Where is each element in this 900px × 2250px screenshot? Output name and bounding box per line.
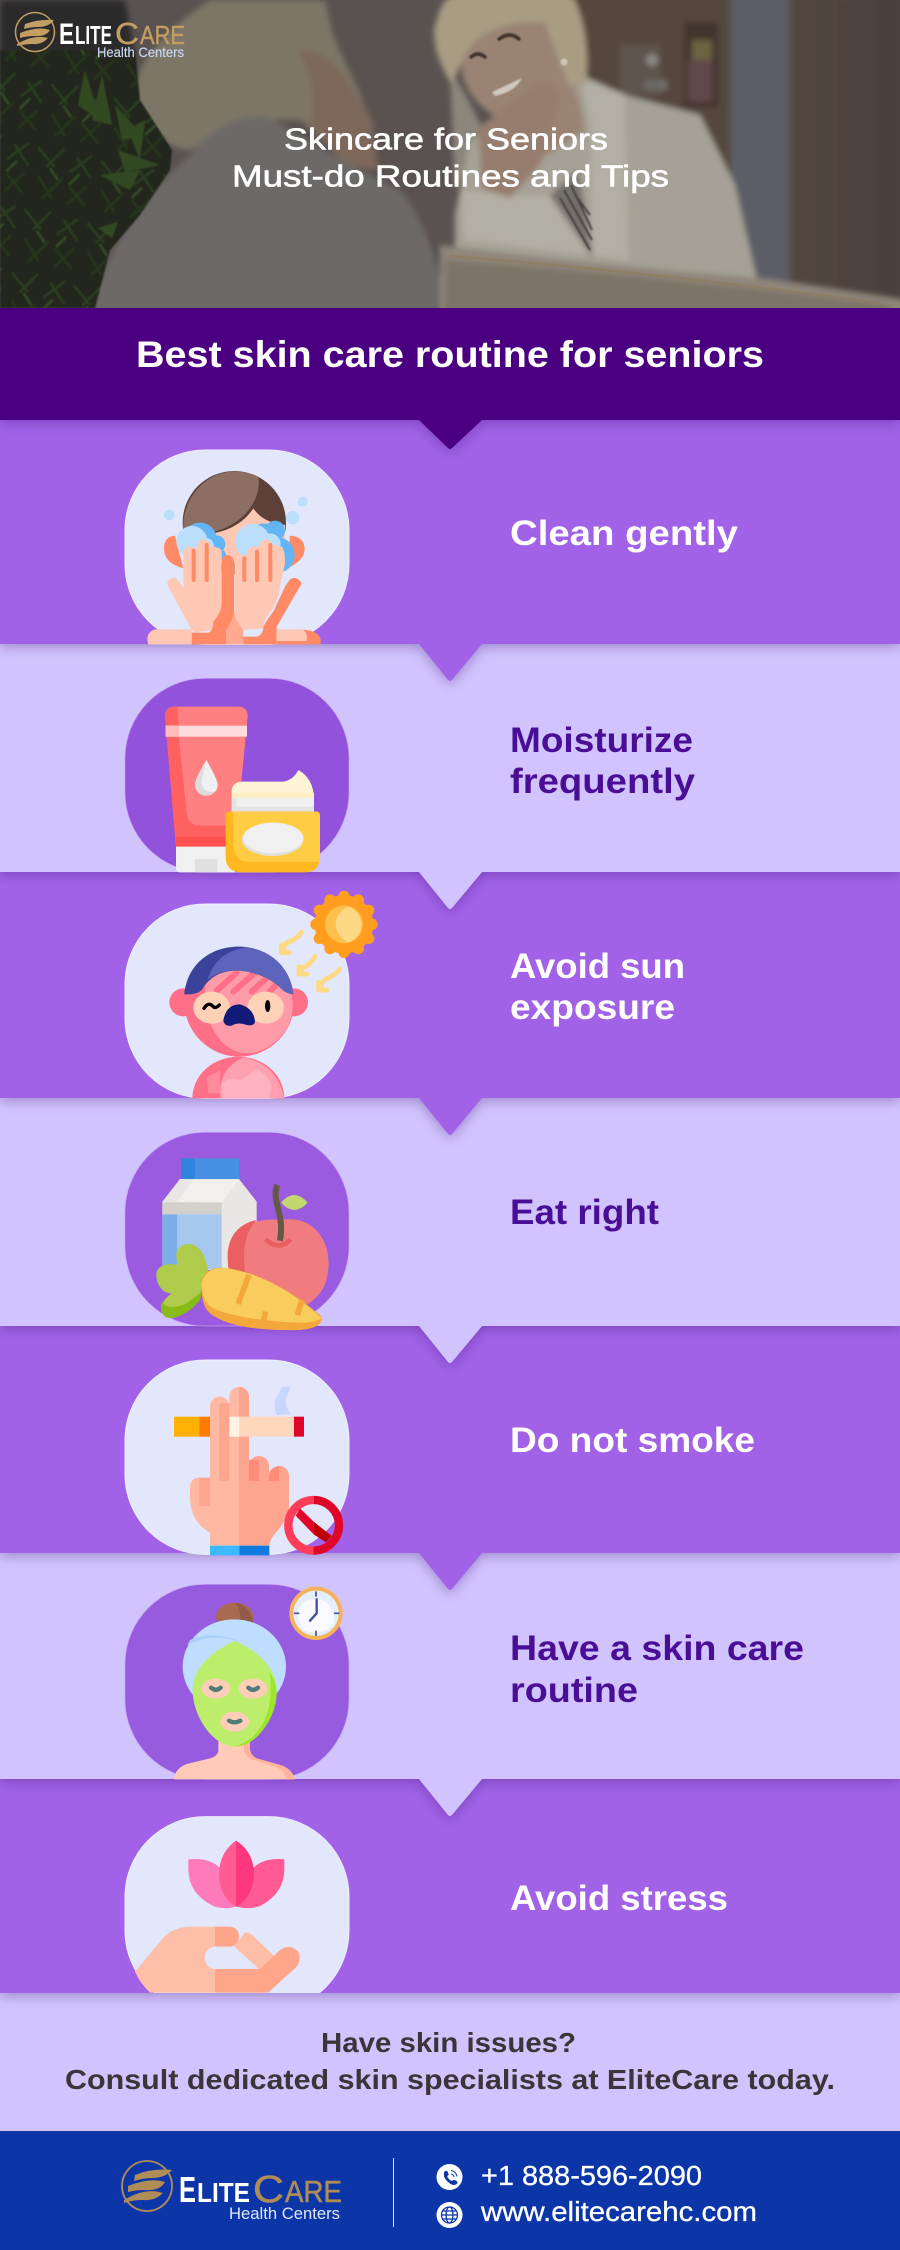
label: Do not smoke [510, 1421, 755, 1460]
panel: Do not smoke [0, 1326, 900, 1590]
footer logo: Health Centers [229, 2204, 340, 2223]
label [510, 1629, 804, 1710]
brand logo, header: Health Centers [97, 44, 184, 60]
icon: lotus and hand [125, 1817, 349, 2011]
brand logo, header: LITE [75, 20, 112, 50]
label: Avoid stress [510, 1879, 728, 1918]
title [232, 122, 669, 194]
website: www.elitecarehc.com [480, 2196, 757, 2227]
section heading band: Best skin care routine for seniors [136, 334, 764, 375]
phone number: +1 888-596-2090 [481, 2160, 702, 2191]
label [510, 947, 685, 1027]
brand logo, header: ARE [140, 20, 185, 50]
icon: washing face [125, 450, 349, 644]
panel: Avoid sun exposure [0, 872, 900, 1140]
icon: face mask and clock [125, 1584, 349, 1779]
call to action panel: Consult dedicated skin specialists at EliteCare today. [65, 2064, 835, 2095]
header photo [0, 0, 900, 315]
icon: globe [436, 2202, 462, 2228]
label: Moisturize [510, 721, 693, 760]
icon: milk, apple, carrot [125, 1132, 349, 1330]
footer logo: ARE [285, 2174, 342, 2209]
panel: Moisturize frequently [0, 644, 900, 909]
footer panel [0, 2131, 900, 2250]
call to action panel [0, 1993, 900, 2131]
label: Clean gently [510, 514, 739, 553]
foliage [0, 40, 180, 310]
icon: cream tube and jar [125, 678, 349, 872]
icon: hand with cigarette [125, 1360, 349, 1555]
label: Eat right [510, 1193, 659, 1232]
label: Avoid sun [510, 947, 685, 986]
sunburned body [192, 1056, 284, 1098]
title: Must-do Routines and Tips [232, 158, 669, 194]
title: Skincare for Seniors [284, 122, 608, 156]
label [510, 721, 696, 801]
label: Have a skin care [510, 1629, 804, 1668]
icon: phone [436, 2164, 462, 2190]
label: exposure [510, 988, 675, 1027]
label: frequently [510, 762, 696, 801]
brand logo, header: E [59, 18, 74, 51]
icon: sunburned face and sun [124, 890, 378, 1099]
footer logo [122, 2161, 342, 2223]
section heading band [0, 308, 900, 449]
footer logo: LITE [197, 2177, 250, 2208]
footer logo: E [179, 2169, 196, 2210]
panel: Eat right [0, 1098, 900, 1363]
panel: Have a skin care routine [0, 1553, 900, 1816]
panel: Avoid stress [0, 1779, 900, 2011]
brand logo, header: C [115, 16, 139, 51]
call to action panel: Have skin issues? [321, 2027, 576, 2058]
panel: Clean gently [0, 420, 900, 681]
footer logo: C [253, 2169, 284, 2211]
brand logo, header [16, 12, 185, 60]
label: routine [510, 1671, 638, 1710]
